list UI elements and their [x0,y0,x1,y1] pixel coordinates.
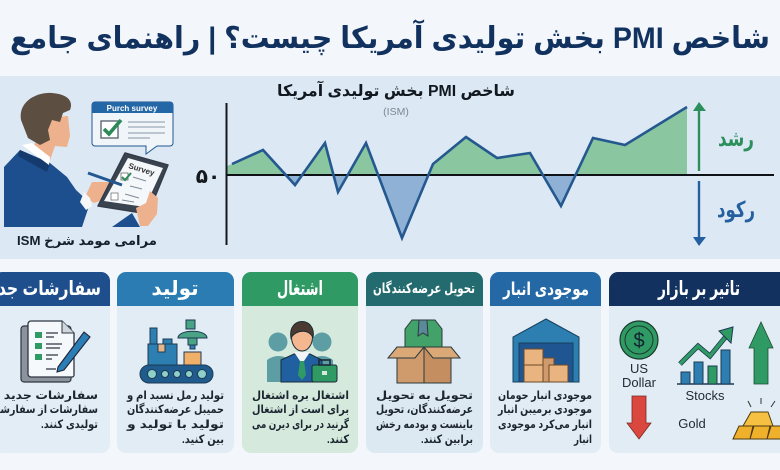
text block [376,390,473,446]
label: Gold: Gold [678,416,706,431]
text block: انبار می‌کرد موجودی [498,419,592,432]
icon: survey speech bubble: Purch survey [107,104,158,113]
icon: checklist and pen [21,321,90,382]
icon: warehouse [513,319,579,382]
text block: حمیبل عرضه‌کنندگان [127,402,224,416]
arrow: stocks up [749,322,773,384]
text block: تولیدی کنند. [41,419,98,432]
panel: market impact [609,272,780,453]
heading: موجودی انبار [502,279,589,300]
expansion areas [227,107,687,175]
icon: stocks chart [677,327,734,384]
text block: کنند. [327,434,349,446]
icon: gold bars [733,398,780,439]
label: Stocks: Stocks [685,388,725,403]
icon: factory conveyor [140,320,213,383]
label: US Dollar: Dollar [622,375,657,390]
icon: dollar coin [620,321,658,359]
baseline 50 [226,174,774,176]
text block: گرنید در برای دیرن می [252,417,349,431]
text block [252,390,349,446]
chart title: شاخص PMI بخش تولیدی آمریکا [277,80,515,100]
text block: موجودی برمیبن انبار [497,404,592,417]
icon: survey speech bubble [92,102,173,154]
text block: انبار [573,434,592,446]
text block: برابین کنند. [421,434,473,446]
chart subtitle: (ISM) [383,106,409,118]
icon: businessman [4,93,120,227]
icon: boxes [388,320,460,383]
text block: تحویل به تحویل [376,390,473,403]
panel: chart band [0,76,780,259]
axis label 50: ۵۰ [196,166,220,188]
label: US Dollar [622,361,657,390]
icon: employees [267,322,337,382]
label: US Dollar: US [630,361,648,376]
panel: new orders [0,272,110,453]
contraction areas [287,175,574,238]
text block: موجودی انبار حومان [498,390,592,403]
label: contraction: رکود [717,197,755,223]
caption: مرامی مومد شرخ ISM [17,233,157,248]
label: growth: رشد [718,126,754,151]
text block [126,390,224,446]
arrow: growth [693,102,706,171]
panel: inventories [490,272,601,453]
icon: tablet: Survey [127,161,156,178]
title: شاخص PMI بخش تولیدی آمریکا چیست؟ | راهنمای جامع [10,19,770,56]
text block: تولید رمل نسبد ام و [126,390,224,403]
line series [232,107,687,238]
panel: supplier deliveries [366,272,483,453]
text block [0,390,98,432]
heading: تاثیر بر بازار [657,278,740,300]
illustration: ISM survey manager [4,93,173,248]
heading: اشتغال [277,278,323,300]
heading: تحویل عرضه‌کنندگان [373,280,475,297]
chart: PMI line [196,80,774,245]
panel: production [117,272,234,453]
text block: تولید با تولید و [126,419,224,432]
text block: بین کنید. [182,434,224,446]
panel: employment [242,272,358,453]
arrow: dollar down [627,396,651,439]
text block: اشتغال بره اشتغال [252,390,349,402]
heading: تولید [151,278,199,300]
arrow: contraction [693,181,706,246]
axis [226,103,228,245]
icon: tablet [88,153,168,227]
text block [497,390,592,446]
text block: باینست و بودمه رخش [376,419,473,432]
icon: dollar coin: $ [633,330,645,352]
text block: برای است از اشتغال [252,404,349,416]
text block: عرضه‌کنندگان، تحویل [376,402,473,417]
